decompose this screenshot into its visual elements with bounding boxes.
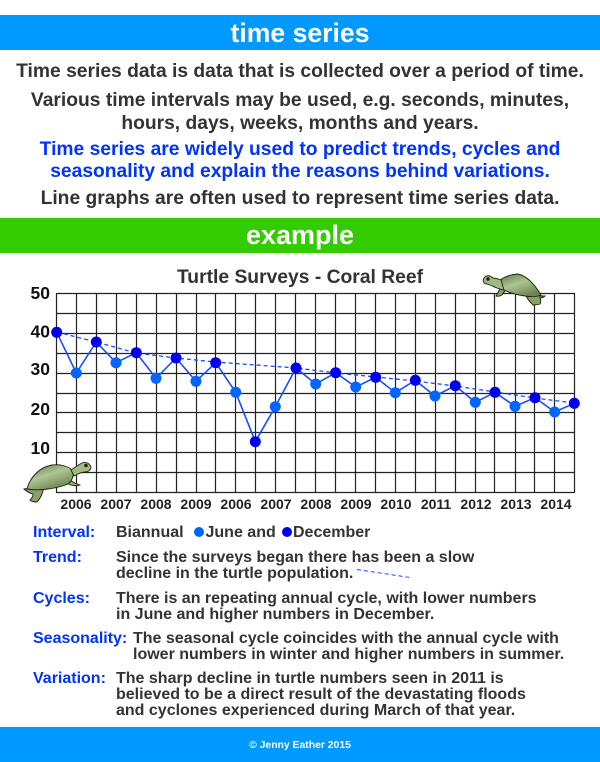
intro text: uses highlighted: seasonality and explain the reasons behind variations. [50, 161, 550, 182]
x axis labels: 2009 [180, 496, 212, 512]
footer banner: © Jenny Eather 2015 [249, 740, 351, 751]
x axis labels: 2008 [300, 496, 332, 512]
seasonality text: The seasonal cycle coincides with the annual cycle with [133, 630, 559, 647]
x axis labels: 2010 [380, 496, 412, 512]
trend line [57, 332, 574, 403]
intro text: definition: Time series data is data that is collected over a period of time. [16, 61, 584, 82]
chart title: Turtle Surveys - Coral Reef [177, 267, 424, 288]
trend text [116, 549, 474, 582]
x axis labels: 2012 [460, 496, 492, 512]
example banner: example [246, 220, 354, 250]
June data points [71, 357, 560, 418]
intro text: line graphs: Line graphs are often used to represent time series data. [41, 188, 559, 209]
intro text: intervals: Various time intervals may be used, e.g. seconds, minutes, [31, 90, 569, 111]
intro text: intervals: hours, days, weeks, months and years. [121, 112, 479, 134]
label: interval: Interval: [33, 524, 95, 541]
seasonality text [133, 630, 564, 663]
title banner: time series [231, 18, 369, 48]
footer banner [0, 727, 600, 762]
cycles text: There is an repeating annual cycle, with lower numbers [116, 590, 537, 607]
icon: turtle bottom left [24, 462, 91, 502]
label: seasonality: Seasonality: [33, 630, 127, 647]
example banner [0, 218, 600, 253]
legend: June: June and [206, 524, 276, 541]
label: cycles: Cycles: [33, 590, 90, 607]
icon: turtle top right [483, 274, 545, 305]
definition: interval [33, 524, 370, 541]
label: variation: Variation: [33, 670, 106, 687]
variation text: believed to be a direct result of the devastating floods [116, 686, 526, 703]
x axis labels: 2006 [60, 496, 92, 512]
definition: trend [33, 549, 474, 582]
intro text: intervals [31, 90, 569, 134]
label: trend: Trend: [33, 549, 82, 566]
December data points [51, 327, 580, 447]
trend text: decline in the turtle population. [116, 565, 353, 582]
intro text: uses highlighted: Time series are widely used to predict trends, cycles and [40, 138, 560, 160]
x axis labels: 2009 [340, 496, 372, 512]
title banner [0, 15, 600, 50]
cycles text: in June and higher numbers in December. [116, 606, 434, 623]
variation text [116, 670, 526, 719]
y axis labels: 50 [31, 283, 50, 303]
y axis labels [31, 283, 50, 458]
definition: seasonality [33, 630, 564, 663]
y axis labels: 20 [31, 399, 50, 419]
x axis labels: 2011 [421, 496, 451, 512]
intro text: uses highlighted [40, 138, 560, 182]
seasonality text: lower numbers in winter and higher numbers in summer. [133, 646, 564, 663]
y axis labels: 30 [31, 359, 50, 379]
legend: December: December [293, 524, 370, 541]
trend sample line [356, 569, 410, 578]
x axis labels: 2013 [500, 496, 532, 512]
variation text: The sharp decline in turtle numbers seen in 2011 is [116, 670, 504, 687]
trend text: Since the surveys began there has been a slow [116, 549, 474, 566]
definition: cycles [33, 590, 537, 623]
variation text: and cyclones experienced during March of that year. [116, 702, 515, 719]
x axis labels: 2006 [220, 496, 252, 512]
x axis labels: 2007 [100, 496, 132, 512]
x axis labels: 2014 [540, 496, 572, 512]
cycles text [116, 590, 537, 623]
x axis labels: 2008 [140, 496, 172, 512]
x axis labels: 2007 [260, 496, 292, 512]
data line [57, 332, 574, 442]
y axis labels: 40 [31, 322, 50, 342]
definition: variation [33, 670, 526, 719]
x axis labels [60, 496, 572, 512]
y axis labels: 10 [31, 438, 50, 458]
interval text: Biannual [116, 524, 184, 541]
line chart: turtle surveys [23, 267, 580, 512]
